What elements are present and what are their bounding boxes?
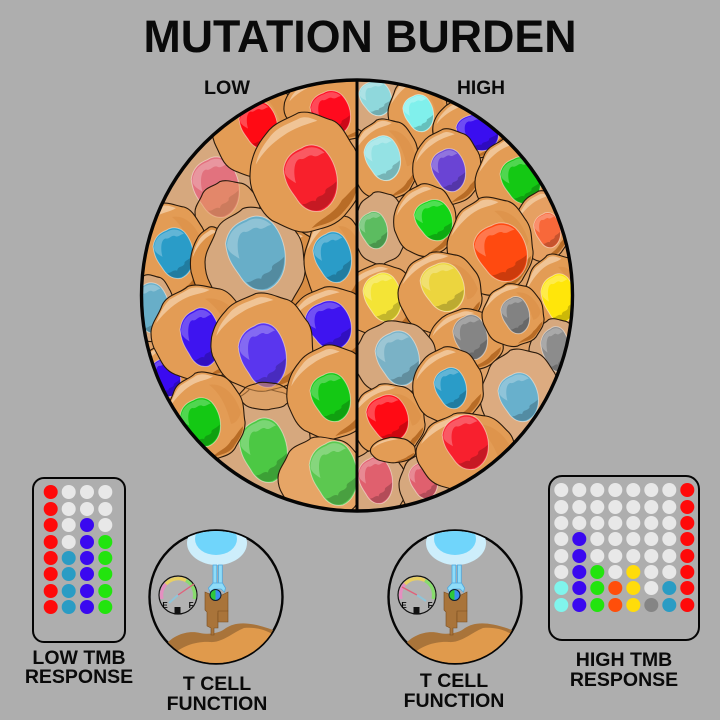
panel: tumor cell circle bbox=[126, 69, 587, 519]
heading: high: HIGH bbox=[457, 78, 505, 99]
label: low T cell function: FUNCTION bbox=[167, 693, 267, 715]
label: low TMB response bbox=[25, 647, 133, 688]
label: high T cell function: T CELL bbox=[420, 670, 488, 692]
icon: low T cell function: F bbox=[189, 601, 194, 610]
circle border and divider bbox=[142, 80, 572, 511]
cells: high mutation half bbox=[358, 82, 571, 510]
label: high T cell function: FUNCTION bbox=[404, 690, 504, 712]
cells: low mutation half bbox=[143, 82, 356, 510]
icon: high T cell function bbox=[388, 521, 525, 667]
panel: high TMB response dot grid bbox=[549, 476, 699, 640]
label: high TMB response: HIGH TMB bbox=[576, 649, 672, 671]
label: high TMB response bbox=[570, 649, 678, 691]
title: MUTATION BURDEN bbox=[144, 11, 576, 62]
icon: low T cell function: E bbox=[162, 601, 168, 610]
label: high TMB response: RESPONSE bbox=[570, 669, 678, 691]
heading: low: LOW bbox=[204, 78, 250, 99]
panel: low TMB response dot grid bbox=[33, 478, 125, 642]
label: low TMB response: RESPONSE bbox=[25, 666, 133, 688]
icon: high T cell function: E bbox=[401, 601, 407, 610]
label: high T cell function bbox=[404, 670, 504, 712]
label: low TMB response: LOW TMB bbox=[32, 647, 126, 669]
label: low T cell function bbox=[167, 673, 267, 715]
icon: low T cell function bbox=[150, 521, 286, 667]
icon: high T cell function: F bbox=[428, 601, 433, 610]
label: low T cell function: T CELL bbox=[183, 673, 251, 695]
